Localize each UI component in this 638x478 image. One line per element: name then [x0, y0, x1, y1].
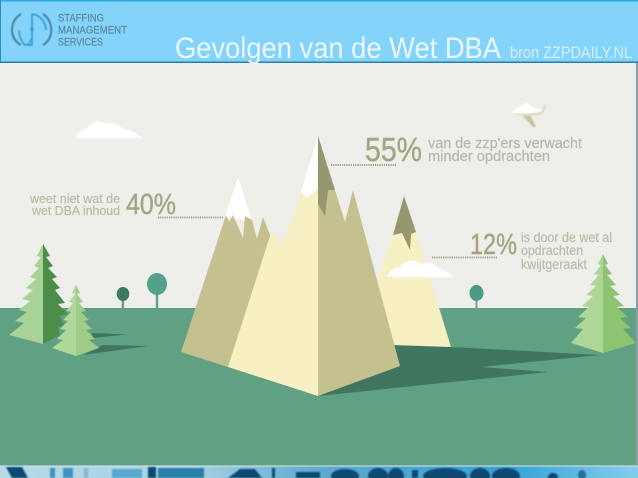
- logo text: [58, 12, 127, 48]
- number 40%: 40%: [126, 189, 176, 221]
- label 55%: minder opdrachten: [428, 149, 550, 165]
- label 40%: [29, 192, 120, 218]
- callout 12%: [432, 229, 612, 272]
- main snow: [301, 136, 318, 198]
- leader 55%: [331, 164, 396, 166]
- left mountain: [181, 177, 275, 367]
- small tree teal: [147, 273, 167, 309]
- tree left small: [52, 285, 99, 356]
- cloud left: [75, 121, 143, 138]
- logo text: STAFFING: [58, 12, 104, 24]
- number 12%: 12%: [470, 229, 517, 261]
- leader 12%: [432, 256, 497, 258]
- label 12%: is door de wet al: [521, 230, 612, 245]
- label 12%: kwijtgeraakt: [521, 257, 587, 272]
- label 55%: [428, 136, 582, 165]
- left mountain face: [181, 215, 275, 367]
- plane: [510, 102, 547, 127]
- small tree right: [470, 285, 484, 309]
- mountain shadow: [318, 345, 600, 396]
- tree shadow 1: [92, 333, 127, 338]
- logo mark: [12, 14, 51, 45]
- right edge: [636, 63, 638, 466]
- back mountain: [372, 196, 451, 347]
- cloud right: [387, 261, 453, 277]
- shaded face: [318, 136, 400, 396]
- small tree dark: [117, 287, 129, 309]
- dark ridge: [318, 136, 335, 216]
- tree right: [571, 254, 636, 353]
- label 12%: opdrachten: [521, 243, 583, 258]
- logo: [12, 12, 127, 48]
- left mountain snow: [225, 177, 252, 222]
- callout 55%: [331, 131, 582, 168]
- photo strip: [0, 466, 638, 478]
- logo text: SERVICES: [58, 36, 103, 48]
- number 55%: 55%: [365, 131, 422, 168]
- back mountain cap: [393, 196, 416, 250]
- callout 40%: [29, 189, 223, 221]
- leader 40%: [158, 216, 223, 218]
- header band: [0, 0, 638, 63]
- cream face: [228, 188, 318, 396]
- main mountain: [228, 136, 400, 396]
- title: Gevolgen van de Wet DBA: [175, 32, 501, 65]
- label 12%: [521, 230, 612, 272]
- ground: [0, 308, 638, 466]
- label 40%: weet niet wat de: [29, 192, 120, 206]
- label 55%: van de zzp'ers verwacht: [428, 136, 582, 152]
- label 40%: wet DBA inhoud: [31, 204, 120, 218]
- tree left large: [9, 244, 68, 344]
- logo text: MANAGEMENT: [58, 24, 127, 36]
- tree shadow 2: [83, 345, 148, 355]
